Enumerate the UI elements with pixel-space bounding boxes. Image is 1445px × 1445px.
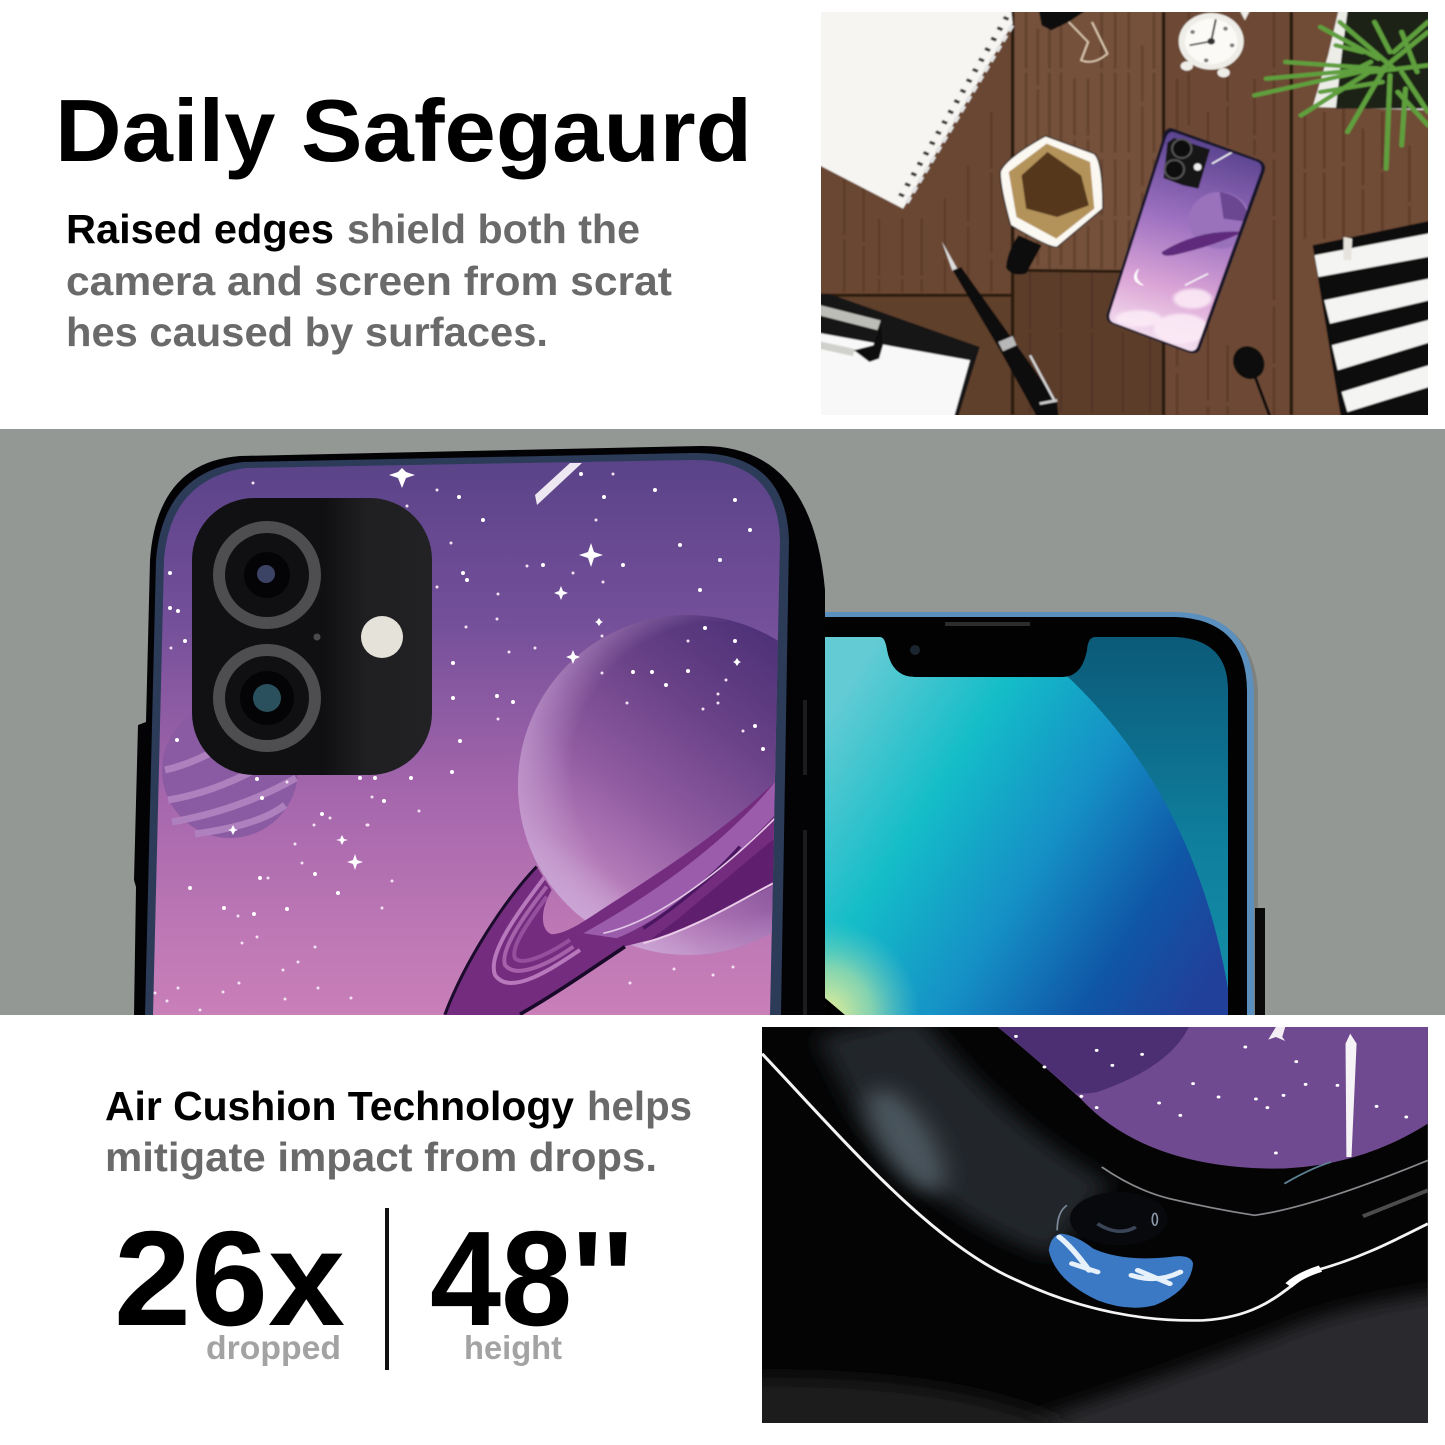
text block: raised edges [66, 206, 672, 355]
screen artwork [153, 460, 780, 1015]
text block: air cushion technology [105, 1083, 692, 1180]
lens: upper [213, 521, 321, 629]
lens: lower [213, 644, 321, 752]
icon: spiral notebook [813, 5, 1013, 209]
stat: 26x dropped: 26x [114, 1203, 345, 1354]
middle band background [0, 429, 1445, 1015]
text block: raised edges: camera and screen from scrat [66, 258, 672, 304]
stat: 48 inch height: 48'' [430, 1203, 633, 1354]
icon: coffee cup [1000, 136, 1103, 275]
meteor [535, 463, 582, 505]
bumper sheen [817, 1014, 1110, 1257]
purple screen area [998, 1027, 1428, 1169]
text block: raised edges: Raised edges [66, 206, 334, 252]
saturn ring [443, 780, 777, 1015]
edge highlights [762, 1054, 1428, 1320]
icon: green plant [1255, 5, 1436, 169]
icon: striped notebook [1312, 220, 1428, 415]
stat: 26x dropped: dropped [206, 1329, 341, 1366]
icon: pen [942, 241, 1059, 422]
flash [361, 616, 403, 658]
text block: air cushion technology: Air Cushion Technology [105, 1083, 574, 1129]
lifestyle photo: phone on wooden desk [813, 5, 1436, 422]
title: Daily Safegaurd [55, 81, 752, 180]
text block: raised edges: hes caused by surfaces. [66, 309, 548, 355]
icon: spoon [1232, 346, 1272, 415]
close-up photo: air cushion corner with droplet [762, 1027, 1428, 1423]
stars [155, 468, 763, 1010]
icon: alarm clock [1179, 5, 1253, 77]
text block: air cushion technology: mitigate impact from drops. [105, 1134, 657, 1180]
icon: clipboard [813, 294, 980, 422]
stat: 48 inch height: height [464, 1329, 562, 1366]
saturn planet [518, 615, 778, 955]
small planet [162, 727, 298, 838]
back phone: purple galaxy case [134, 446, 858, 1020]
text block: raised edges: shield both the [347, 206, 640, 252]
wallpaper [825, 637, 1232, 1015]
icon: binder clip [1038, 5, 1107, 62]
dual camera module [192, 498, 432, 775]
icon: water droplet [1049, 1192, 1193, 1308]
text block: air cushion technology: helps [587, 1083, 692, 1129]
phone in photo [1106, 128, 1266, 354]
front phone: blue iPhone screen [820, 612, 1265, 1015]
